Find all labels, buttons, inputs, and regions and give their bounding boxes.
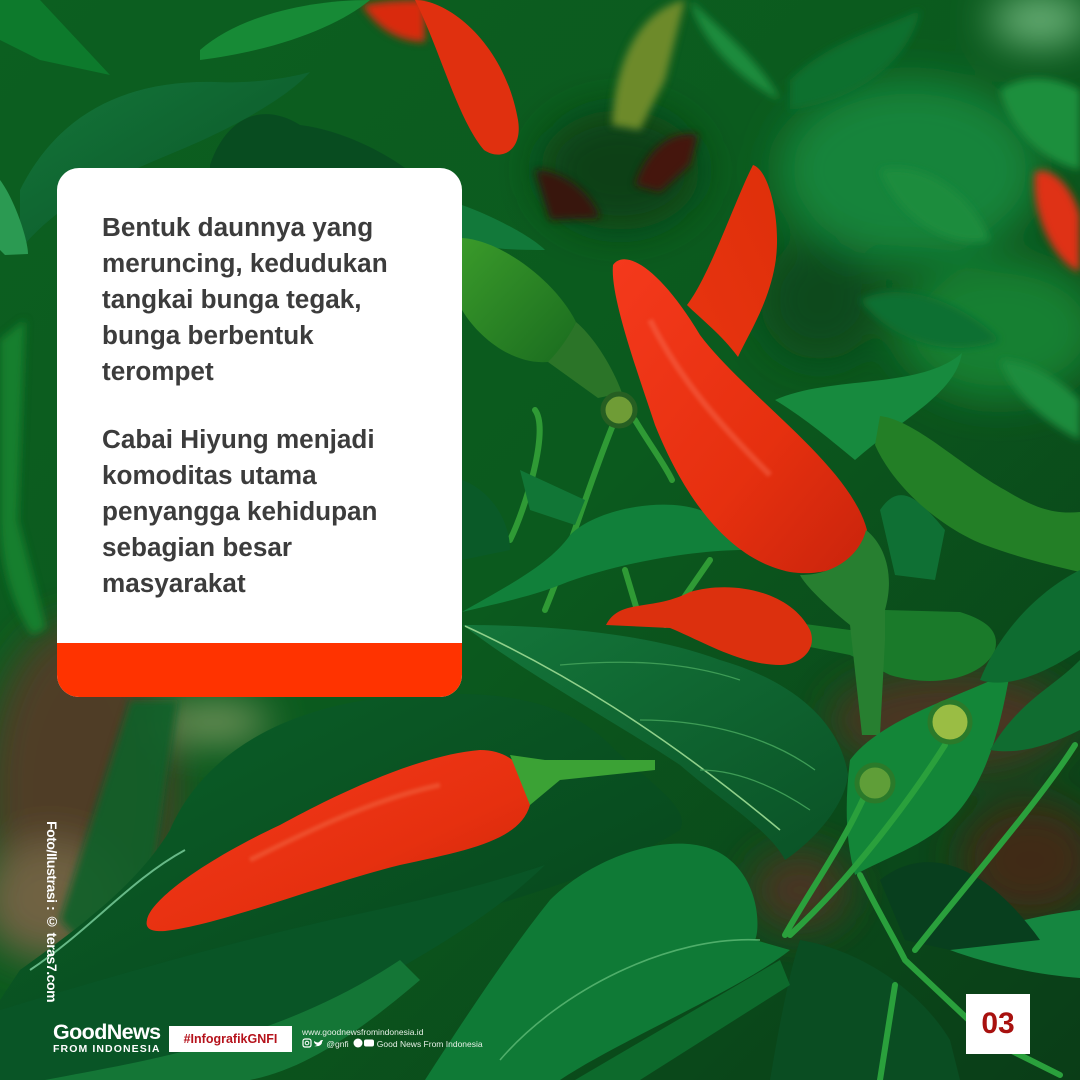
blurred upper right foliage bbox=[690, 0, 1080, 440]
website and social handles: www.goodnewsfromindonesia.id bbox=[302, 1027, 423, 1037]
paragraph 1: terompet bbox=[102, 356, 214, 386]
paragraph 1: bunga berbentuk bbox=[102, 320, 314, 350]
paragraph 1 bbox=[102, 212, 388, 386]
lower right stems and buds bbox=[785, 745, 1075, 1080]
logo bbox=[53, 1020, 161, 1055]
hashtag label: #InfografikGNFI bbox=[184, 1032, 277, 1046]
lower red chili bbox=[147, 750, 655, 931]
red chili top bbox=[415, 0, 519, 155]
stems and bud centre bbox=[510, 410, 710, 625]
paragraph 1: meruncing, kedudukan bbox=[102, 248, 388, 278]
paragraph 1: Bentuk daunnya yang bbox=[102, 212, 373, 242]
bud right bbox=[930, 702, 970, 742]
dark leaf bottom left bbox=[0, 694, 682, 1080]
mid leaves bbox=[462, 353, 962, 612]
main red chili bbox=[613, 259, 889, 735]
green chili left bbox=[462, 238, 622, 398]
lower right leaves bbox=[425, 570, 1080, 1080]
paragraph 2: sebagian besar bbox=[102, 532, 292, 562]
hashtag label bbox=[169, 1026, 292, 1052]
logo: GoodNews bbox=[53, 1020, 160, 1044]
paragraph 2: Cabai Hiyung menjadi bbox=[102, 424, 375, 454]
red footer bar bbox=[57, 643, 462, 697]
paragraph 2 bbox=[102, 424, 377, 598]
paragraph 1: tangkai bunga tegak, bbox=[102, 284, 362, 314]
photo credit: Foto/Ilustrasi : © teras7.com bbox=[44, 821, 60, 1002]
green chili lower right bbox=[790, 610, 996, 681]
large leaf centre bbox=[463, 625, 848, 860]
page number: 03 bbox=[981, 1007, 1015, 1040]
paragraph 2: penyangga kehidupan bbox=[102, 496, 377, 526]
logo: FROM INDONESIA bbox=[53, 1043, 161, 1055]
website and social handles bbox=[302, 1027, 483, 1049]
bud lower bbox=[857, 765, 893, 801]
red chili small bbox=[606, 587, 812, 665]
website and social handles: @gnfi Good News From Indonesia bbox=[326, 1039, 483, 1049]
text card bbox=[57, 168, 462, 697]
green chili right bbox=[875, 416, 1080, 572]
leaves upper left bbox=[0, 0, 545, 255]
red chili behind bbox=[687, 165, 777, 357]
page number bbox=[966, 994, 1030, 1054]
paragraph 2: masyarakat bbox=[102, 568, 246, 598]
paragraph 2: komoditas utama bbox=[102, 460, 317, 490]
small bud top bbox=[603, 394, 635, 426]
